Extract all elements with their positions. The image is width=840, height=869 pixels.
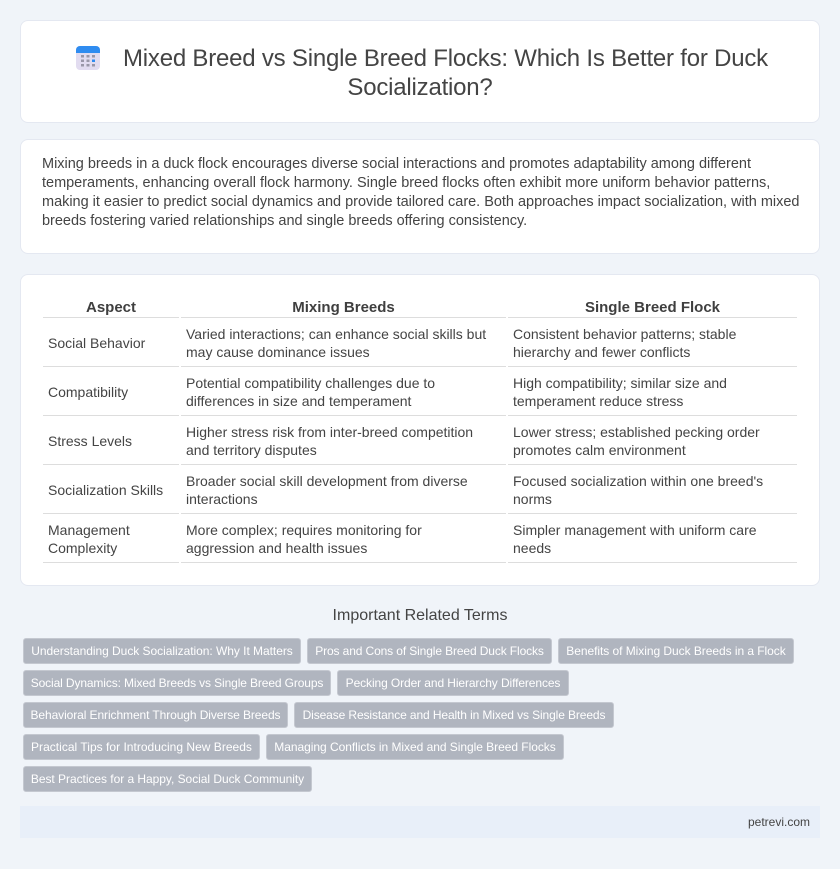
footer source: petrevi.com	[748, 815, 810, 829]
tag	[23, 702, 288, 728]
title	[123, 45, 768, 101]
compatibility: single	[513, 375, 727, 409]
related terms tags	[23, 638, 794, 792]
management complexity: mixing: More complex; requires monitoring for	[186, 522, 422, 538]
stress levels: single: promotes calm environment	[513, 442, 686, 458]
title: Mixed Breed vs Single Breed Flocks: Which Is Better for Duck	[123, 45, 768, 72]
tag	[337, 670, 569, 696]
heading: related terms: Important Related Terms	[333, 607, 507, 624]
management complexity: single: needs	[513, 540, 551, 556]
management complexity: single	[513, 522, 757, 556]
tag: Understanding Duck Socialization: Why It Matters	[31, 644, 293, 658]
tag	[23, 638, 301, 664]
stress levels: mixing: Higher stress risk from inter-breed competition	[186, 424, 473, 440]
title: Socialization?	[347, 74, 493, 101]
socialization skills: mixing: interactions	[186, 491, 258, 507]
social behavior: single: hierarchy and fewer conflicts	[513, 344, 690, 360]
compatibility: mixing: Potential compatibility challenges due to	[186, 375, 435, 391]
row: stress levels: Stress Levels	[48, 433, 132, 449]
stress levels: single	[513, 424, 760, 458]
tag: Disease Resistance and Health in Mixed vs Single Breeds	[303, 708, 605, 722]
social behavior: single: Consistent behavior patterns; stable	[513, 326, 736, 342]
intro text	[42, 156, 799, 229]
tag: Practical Tips for Introducing New Breeds	[31, 740, 252, 754]
icon: calendar	[76, 46, 100, 70]
compatibility: single: High compatibility; similar size and	[513, 375, 727, 391]
tag: Managing Conflicts in Mixed and Single Breed Flocks	[274, 740, 556, 754]
tag	[294, 702, 614, 728]
table header: single breed flock: Single Breed Flock	[585, 299, 720, 316]
tag	[23, 766, 312, 792]
socialization skills: single	[513, 473, 763, 507]
tag: Pros and Cons of Single Breed Duck Flocks	[315, 644, 544, 658]
row: management complexity	[48, 522, 130, 556]
row: compatibility: Compatibility	[48, 384, 128, 400]
stress levels: mixing: and territory disputes	[186, 442, 317, 458]
social behavior: mixing	[186, 326, 486, 360]
tag	[266, 734, 564, 760]
stress levels: mixing	[186, 424, 473, 458]
tag	[23, 734, 260, 760]
row: management complexity: Management	[48, 522, 130, 538]
intro text: Mixing breeds in a duck flock encourages diverse social interactions and promotes adaptability among different	[42, 156, 751, 172]
socialization skills: single: norms	[513, 491, 552, 507]
table header: mixing breeds: Mixing Breeds	[292, 299, 395, 316]
table header: aspect: Aspect	[86, 299, 136, 316]
management complexity: mixing: aggression and health issues	[186, 540, 367, 556]
social behavior: single	[513, 326, 736, 360]
compatibility: single: temperament reduce stress	[513, 393, 683, 409]
footer bar	[20, 806, 820, 838]
compatibility: mixing	[186, 375, 435, 409]
panel: introduction	[20, 139, 820, 254]
tag	[307, 638, 552, 664]
socialization skills: single: Focused socialization within one breed's	[513, 473, 763, 489]
intro text: making it easier to predict social dynamics and provide tailored care. Both approaches impact socialization, with mixed	[42, 194, 799, 210]
tag: Best Practices for a Happy, Social Duck Community	[31, 772, 304, 786]
intro text: temperaments, enhancing overall flock harmony. Single breed flocks often exhibit more uniform behavior patterns,	[42, 175, 770, 191]
management complexity: single: Simpler management with uniform care	[513, 522, 757, 538]
tag: Behavioral Enrichment Through Diverse Breeds	[31, 708, 280, 722]
socialization skills: mixing	[186, 473, 468, 507]
socialization skills: mixing: Broader social skill development from diverse	[186, 473, 468, 489]
panel: header	[20, 20, 820, 123]
tag: Benefits of Mixing Duck Breeds in a Flock	[566, 644, 786, 658]
social behavior: mixing: may cause dominance issues	[186, 344, 370, 360]
row: management complexity: Complexity	[48, 540, 117, 556]
tag	[558, 638, 794, 664]
row: social behavior: Social Behavior	[48, 335, 145, 351]
tag: Social Dynamics: Mixed Breeds vs Single Breed Groups	[31, 676, 323, 690]
tag	[23, 670, 331, 696]
compatibility: mixing: differences in size and temperament	[186, 393, 411, 409]
intro text: breeds fostering varied relationships and single breeds offering consistency.	[42, 213, 527, 229]
management complexity: mixing	[186, 522, 422, 556]
row: socialization skills: Socialization Skills	[48, 482, 163, 498]
panel: comparison table	[20, 274, 820, 586]
social behavior: mixing: Varied interactions; can enhance social skills but	[186, 326, 486, 342]
tag: Pecking Order and Hierarchy Differences	[346, 676, 560, 690]
stress levels: single: Lower stress; established pecking order	[513, 424, 760, 440]
